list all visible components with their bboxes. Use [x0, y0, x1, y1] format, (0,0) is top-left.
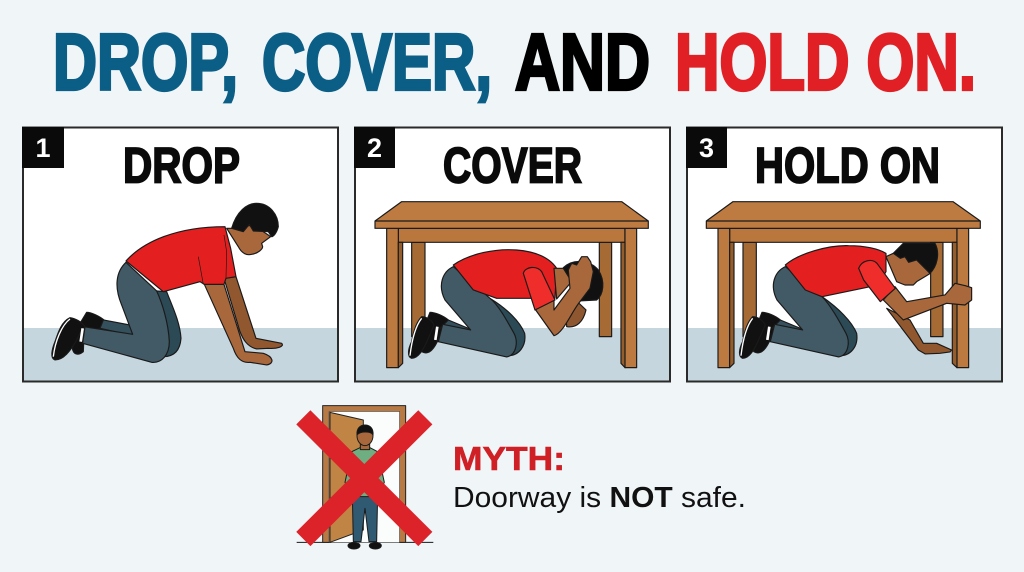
myth statement: Doorway is NOT safe. [453, 482, 746, 514]
myth text [453, 440, 746, 514]
step number 3: 3 [699, 133, 714, 163]
table back legs [412, 242, 612, 337]
title [53, 18, 976, 106]
figure: person holding a table leg [706, 202, 980, 368]
door frame [323, 406, 406, 542]
title: COVER, [262, 18, 492, 106]
step number 2 [354, 127, 395, 168]
person [740, 243, 972, 358]
heading: drop: DROP [123, 138, 240, 194]
step number 1: 1 [35, 133, 51, 163]
standing man [345, 425, 384, 549]
step number 2: 2 [367, 133, 382, 163]
myth label: MYTH: [453, 440, 565, 477]
title: AND [515, 18, 650, 106]
panel: drop [22, 127, 338, 382]
figure: person dropping to hands and knees [52, 203, 282, 365]
title: DROP, [53, 18, 238, 106]
panel: cover [354, 127, 670, 382]
table back legs [743, 242, 943, 337]
red cross [303, 417, 425, 539]
panel: hold on [297, 127, 1002, 549]
open door [330, 412, 363, 542]
step number 1 [22, 127, 64, 168]
figure: person sheltering under a table [375, 202, 648, 368]
heading: hold on: HOLD ON [755, 138, 940, 194]
heading: cover: COVER [443, 138, 582, 194]
person [409, 250, 603, 358]
myth icon: doorway crossed out [297, 406, 433, 549]
table [375, 202, 648, 368]
table front and top [706, 202, 980, 368]
step number 3 [686, 127, 727, 168]
